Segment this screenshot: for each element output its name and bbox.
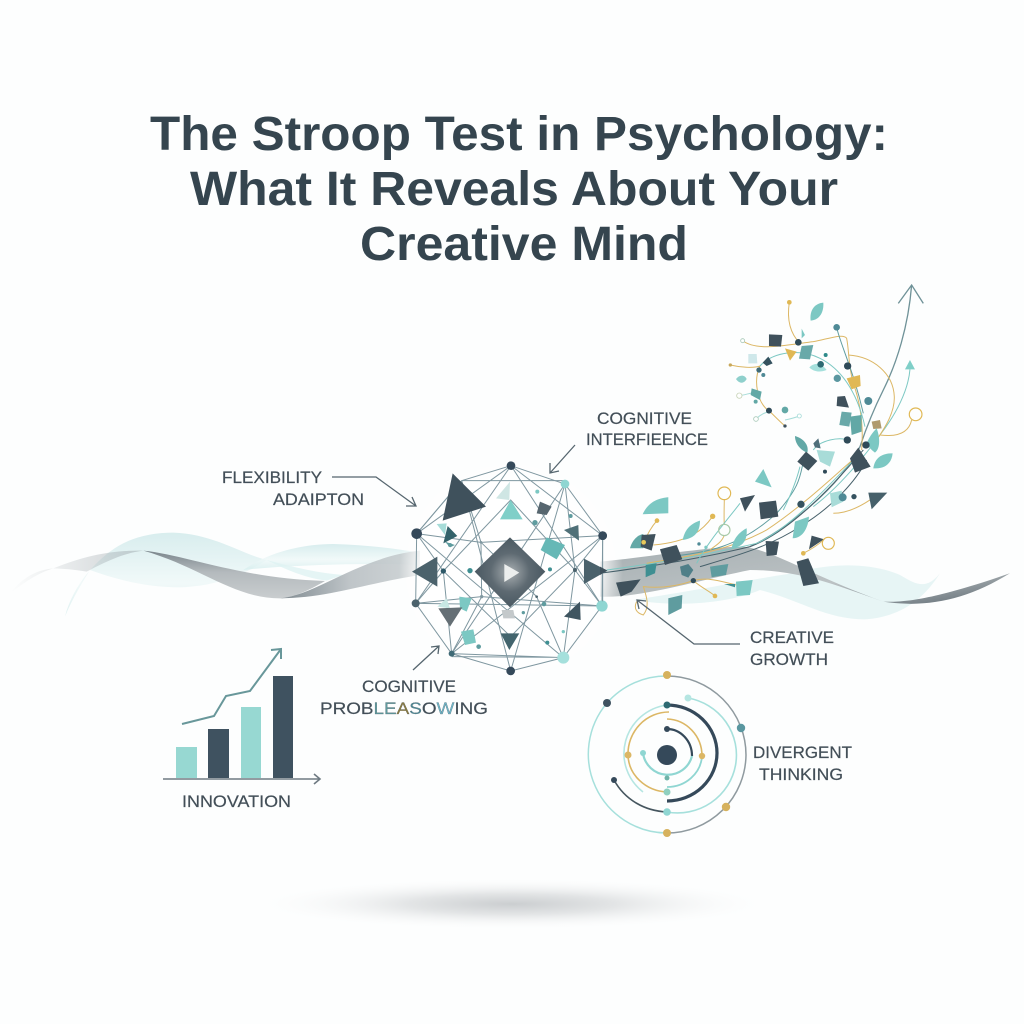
central diamond with play icon [475,537,545,607]
network nodes [411,461,608,675]
title: What It Reveals About Your [190,163,838,216]
growth arrow [750,285,923,547]
label: cognitive problem solving [320,677,488,718]
network halo [399,458,623,682]
arrow: interference to network [550,445,575,473]
label: creative growth [750,628,834,669]
label: cognitive problem solving: COGNITIVE [362,677,456,696]
lower spiral shapes [598,408,922,615]
title: Creative Mind [360,218,688,271]
title: The Stroop Test in Psychology: [150,108,888,161]
flowing ribbon: right [600,547,1010,619]
arrow: flexibility to network [332,477,416,506]
triangles and squares [412,473,607,650]
central network sphere [411,461,608,675]
upper spiral shapes [729,300,882,435]
creative growth spiral [598,285,923,615]
concentric divergent thinking icon [588,671,746,837]
label: flexibility adaptation: FLEXIBILITY [222,468,322,487]
connector curves [600,302,912,615]
bar chart: innovation [163,649,320,784]
scattered teal fragments [437,482,573,649]
label: divergent thinking [753,743,852,784]
ground shadow [252,878,772,930]
title [150,108,888,271]
network edges [416,466,603,671]
arrow: problem solving to network [413,646,439,670]
label: cognitive interference [586,409,708,449]
second teal arrow [813,360,915,507]
label: flexibility adaptation [222,468,364,509]
label: cognitive interference: COGNITIVE [597,409,692,428]
label: cognitive interference: INTERFIEENCE [586,430,708,449]
label: divergent thinking: DIVERGENT [753,743,852,762]
label: creative growth: GROWTH [750,650,828,669]
label: flexibility adaptation: ADAIPTON [273,490,364,509]
label: divergent thinking: THINKING [759,765,843,784]
flowing ribbon: left [10,533,420,617]
label: innovation: INNOVATION [182,792,291,811]
arrow: creative growth to spiral [637,600,740,644]
label: cognitive problem solving: PROB LEASOWING [320,699,488,718]
label: creative growth: CREATIVE [750,628,834,647]
